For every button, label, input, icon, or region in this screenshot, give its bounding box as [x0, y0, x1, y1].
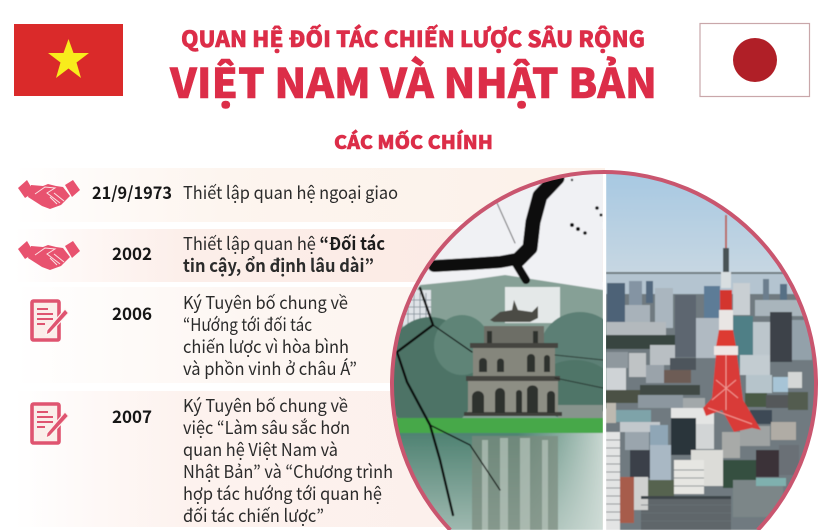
milestone text: tin cậy, ổn định lâu dài” — [183, 253, 374, 278]
Tokyo Tower structure — [703, 215, 761, 432]
milestone text: và phồn vinh ở châu Á” — [183, 356, 357, 381]
icon: document with pen — [32, 404, 68, 443]
milestone text: việc “Làm sâu sắc hơn — [183, 415, 350, 440]
icon: handshake — [18, 180, 80, 209]
milestone text: đối tác chiến lược” — [183, 503, 324, 528]
row 1: 21/9/1973 — [18, 179, 398, 209]
bud dots — [570, 179, 602, 235]
row 3: 2006 — [32, 290, 357, 381]
flag: Japan — [700, 24, 810, 96]
flag: Vietnam — [14, 24, 123, 96]
mid-ground city — [606, 345, 808, 458]
milestone text: Thiết lập quan hệ ngoại giao — [183, 180, 398, 205]
milestone text: Ký Tuyên bố chung về — [183, 290, 348, 315]
tower — [464, 300, 562, 416]
row bands — [15, 168, 605, 527]
foreground city — [606, 408, 799, 530]
milestone text: Thiết lập quan hệ “Đối tác — [183, 231, 385, 256]
milestone text: Ký Tuyên bố chung về — [183, 393, 348, 418]
photo divider — [603, 170, 606, 530]
title line 1: QUAN HỆ ĐỐI TÁC CHIẾN LƯỢC SÂU RỘNG — [181, 22, 645, 54]
distant buildings — [606, 274, 821, 368]
milestone text: chiến lược vì hòa bình — [183, 334, 349, 359]
milestone text: “Hướng tới đối tác — [183, 312, 312, 337]
reflection — [472, 436, 558, 530]
row 2: 2002 — [18, 231, 385, 278]
row 4: 2007 — [32, 393, 393, 528]
photo circle ring — [392, 172, 816, 530]
year: 2007 — [112, 403, 152, 428]
milestone text — [183, 393, 393, 528]
branches — [397, 175, 603, 515]
milestone text: quan hệ Việt Nam và — [183, 437, 338, 462]
section heading: CÁC MỐC CHÍNH — [334, 128, 493, 155]
year: 2006 — [112, 300, 152, 325]
window lines — [606, 439, 704, 521]
icon: document with pen — [32, 301, 68, 340]
year: 21/9/1973 — [92, 179, 172, 204]
year: 2002 — [112, 240, 152, 265]
photo: Tokyo Tower — [606, 170, 821, 530]
milestone text: hợp tác hướng tới quan hệ — [183, 481, 382, 506]
milestone text — [183, 290, 357, 381]
icon: handshake — [18, 241, 80, 270]
photo: Hanoi, Turtle Tower — [394, 174, 607, 530]
milestone text — [183, 231, 385, 278]
title line 2: VIỆT NAM VÀ NHẬT BẢN — [169, 50, 657, 110]
milestone text: Nhật Bản” và “Chương trình — [183, 459, 393, 484]
